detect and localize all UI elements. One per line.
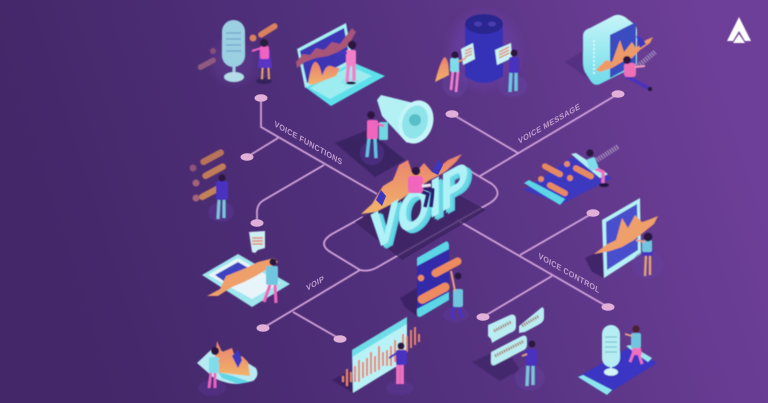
- connector: voice message: [452, 94, 618, 176]
- icon: tablet with splash and person: [202, 231, 290, 307]
- headline: 3D VOIP lettering with person: VOIP: [371, 150, 468, 263]
- icon: smart speaker with two people: [435, 12, 528, 97]
- icon: laptop with waveform and person: [296, 23, 385, 106]
- icon: smartphone with pills and person: [400, 241, 469, 323]
- icon: phone with microphone and person: [578, 325, 657, 395]
- label: voice control: VOICE CONTROL: [538, 251, 601, 295]
- connector: voip loop: [263, 171, 498, 328]
- label: voice message: VOICE MESSAGE: [518, 101, 581, 146]
- label: voice functions: VOICE FUNCTIONS: [274, 119, 344, 167]
- connector: voice control: [457, 213, 608, 317]
- icon: phone with waveform and sitting person: [565, 15, 655, 91]
- logo: white triangle mark: [727, 17, 751, 43]
- label: voip: VOIP: [306, 274, 325, 293]
- connector: voice functions: [247, 98, 377, 223]
- icon: voice pills with person (left): [190, 148, 234, 222]
- icon: speech bubbles with person: [472, 307, 545, 391]
- icon: megaphone with person: [335, 95, 439, 177]
- headline: 3D VOIP lettering with person: VOIP: [374, 152, 471, 265]
- connector lines network: [247, 94, 618, 339]
- connector end nodes: [240, 90, 624, 343]
- icon: mobile device with pills and person: [524, 146, 619, 205]
- icon: tablet with waveform and person: [585, 198, 664, 279]
- icon: chart card with person (bottom left): [197, 341, 257, 396]
- icon: waveform window with person: [332, 317, 419, 395]
- headline: 3D VOIP lettering with person: VOIP: [376, 153, 473, 266]
- connector: voip branch: [293, 312, 340, 339]
- icon: studio microphone with person: [197, 20, 279, 84]
